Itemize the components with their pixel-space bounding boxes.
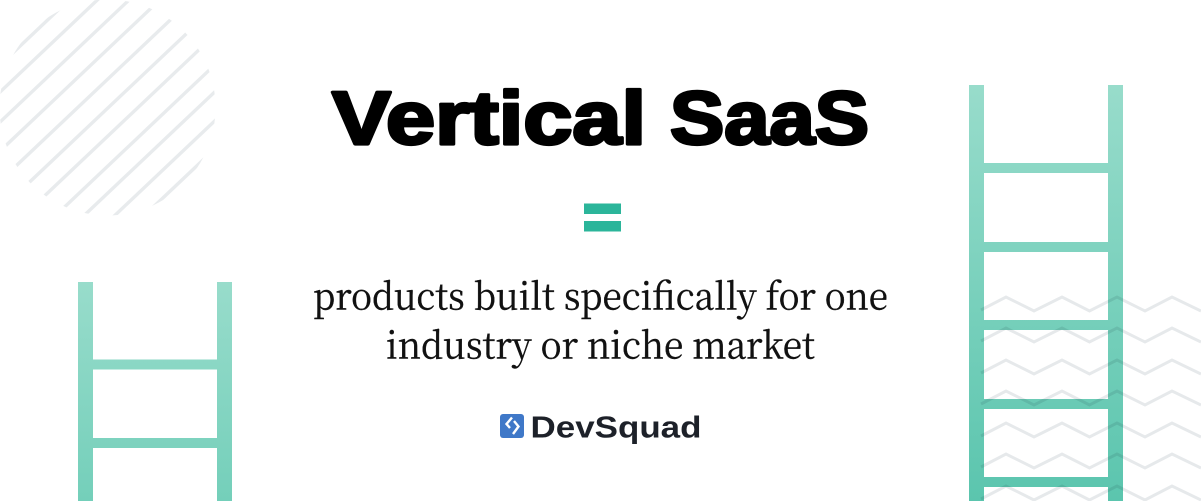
icon: DevSquad mark bbox=[500, 414, 524, 438]
decorative zigzag pattern bbox=[981, 297, 1201, 500]
logo wordmark: DevSquad bbox=[530, 410, 702, 444]
left ladder bbox=[78, 282, 232, 501]
right ladder bbox=[969, 85, 1123, 501]
title: SaaS bbox=[670, 76, 869, 160]
subtitle text bbox=[313, 266, 888, 370]
title: Vertical bbox=[332, 76, 646, 160]
subtitle text: products built specifically for one bbox=[313, 266, 888, 320]
DevSquad logo bbox=[500, 410, 702, 444]
title bbox=[332, 76, 869, 160]
equals sign bbox=[584, 204, 621, 232]
subtitle text: industry or niche market bbox=[386, 316, 815, 370]
decorative striped circle bbox=[0, 0, 215, 216]
